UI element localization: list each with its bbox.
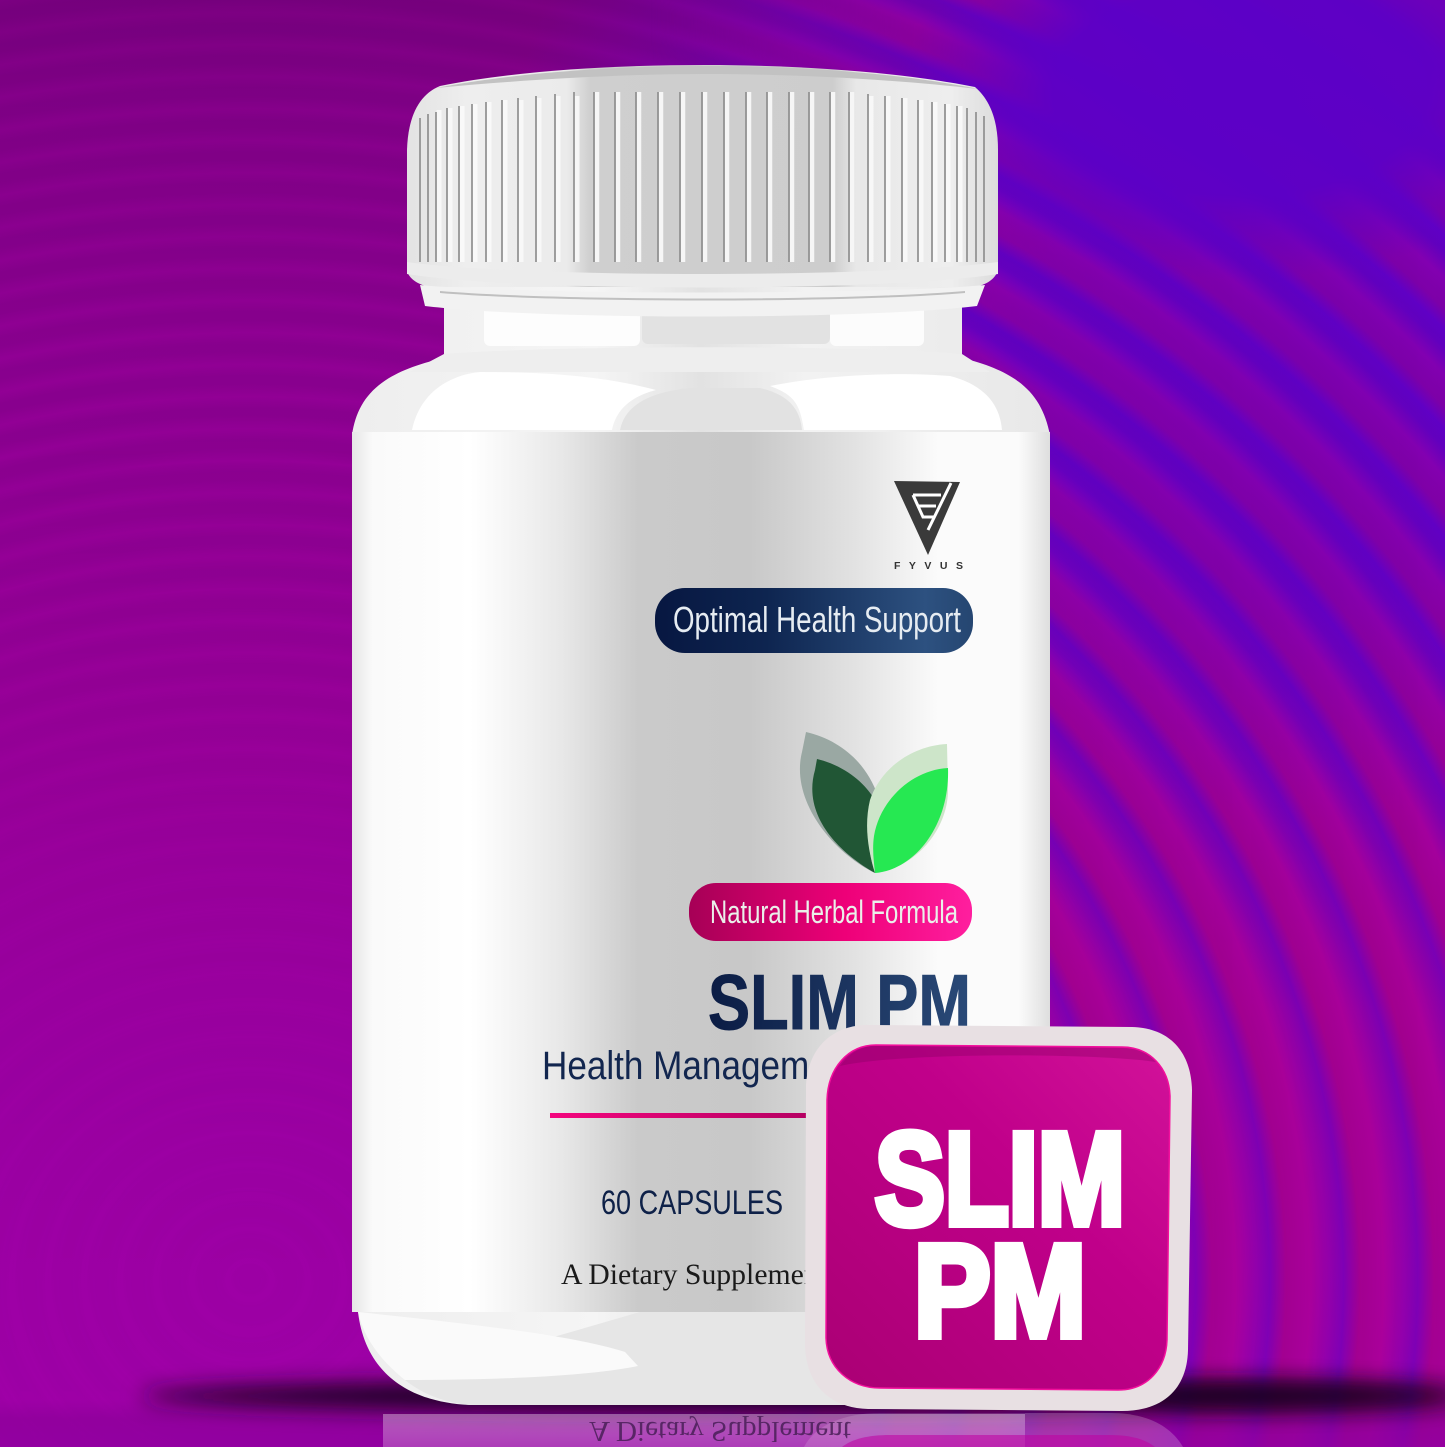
product name: SLIM PM: SLIM PM: [708, 958, 971, 1046]
bottle body: [352, 282, 1050, 1405]
floor shadow: [0, 1379, 1445, 1447]
badge: SLIM PM: [805, 1025, 1192, 1411]
bottle base: [358, 1312, 1050, 1405]
badge text: PM: PM: [914, 1217, 1086, 1364]
cap ribs: grooves: [420, 92, 984, 262]
reflected label text: A Dietary Supplement: [589, 1415, 851, 1447]
pill: Optimal Health Support: [655, 588, 973, 653]
bottle: [352, 282, 1050, 1405]
badge text: SLIM: SLIM: [875, 1105, 1125, 1252]
cap ribs: [420, 92, 984, 262]
icon: green leaves: [800, 732, 948, 873]
badge top inner shade: [840, 1046, 1156, 1066]
pill: Natural Herbal Formula: Natural Herbal Formula: [710, 894, 958, 930]
logo mark: [894, 481, 960, 555]
pill: Natural Herbal Formula: [689, 883, 972, 941]
pill: Optimal Health Support: Optimal Health Support: [673, 599, 961, 640]
background: fine ripple lines: [0, 0, 1004, 514]
label: [352, 432, 1050, 1312]
capsule count: 60 CAPSULES: [601, 1184, 783, 1222]
background: ripple bands: [726, 0, 1445, 1439]
reflected badge: [804, 1413, 1183, 1447]
dietary supplement line: A Dietary Supplement: [561, 1258, 828, 1291]
badge inner panel: [826, 1045, 1170, 1390]
logo wordmark: FYVUS: [894, 560, 963, 572]
shoulder highlights: [412, 372, 1002, 430]
bottle cap: [407, 65, 998, 316]
divider rule: [550, 1113, 840, 1118]
bottle reflection: [383, 1413, 1183, 1447]
cap ribs: highlights: [597, 92, 852, 262]
subtitle: Health Management: Health Management: [542, 1044, 858, 1088]
cap top rim: [436, 66, 978, 89]
badge frame: [805, 1025, 1192, 1411]
neck highlights: [410, 298, 990, 372]
cap lower band: [407, 262, 998, 288]
brand logo: FYVUS: [894, 481, 963, 572]
